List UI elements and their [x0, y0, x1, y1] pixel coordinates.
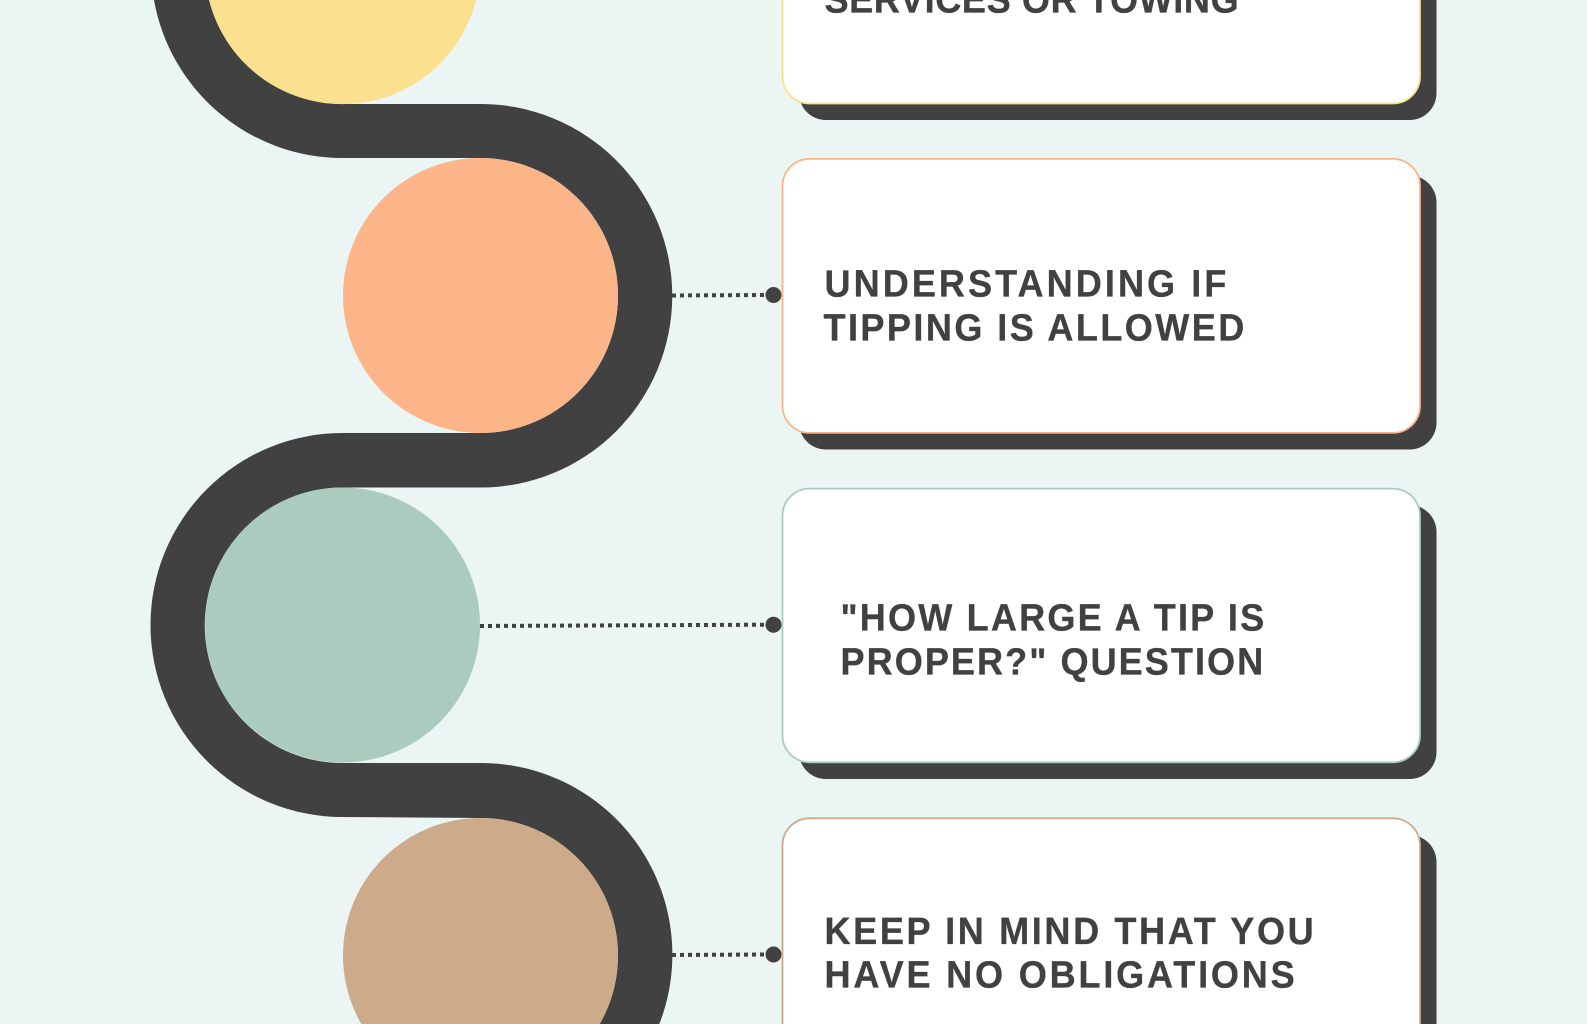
panel: step 2 card — [782, 159, 1436, 450]
card 4 shadow — [799, 835, 1436, 1024]
winding road path — [151, 0, 672, 1024]
card 2 body — [782, 159, 1420, 433]
card 3 text — [840, 596, 1264, 683]
connector: step 4 — [672, 946, 782, 962]
card 2 text — [824, 262, 1244, 349]
card 3 body — [782, 489, 1420, 762]
card 4 body — [782, 818, 1420, 1024]
card 3 text: "HOW LARGE A TIP IS — [840, 596, 1264, 639]
step 1 circle: yellow — [209, 0, 476, 104]
step 4 circle: tan — [343, 818, 618, 1024]
card 4 text — [824, 909, 1314, 996]
card 1 shadow — [799, 0, 1436, 120]
card 2 shadow — [799, 176, 1436, 450]
card 2 text: TIPPING IS ALLOWED — [824, 306, 1244, 349]
card 4 text: KEEP IN MIND THAT YOU — [824, 909, 1314, 952]
card 1 body — [782, 0, 1420, 104]
connector: step 3 — [480, 617, 782, 633]
card 4 text: HAVE NO OBLIGATIONS — [824, 953, 1295, 996]
step 3 circle: green — [205, 488, 480, 762]
panel: step 1 card — [782, 0, 1436, 120]
card 3 text: PROPER?" QUESTION — [840, 640, 1263, 683]
panel: step 4 card — [782, 818, 1436, 1024]
panel: step 3 card — [782, 489, 1436, 779]
card 3 shadow — [799, 505, 1436, 779]
step 2 circle: peach — [343, 158, 618, 433]
card 2 text: UNDERSTANDING IF — [824, 262, 1226, 305]
connector: step 2 — [672, 287, 782, 303]
